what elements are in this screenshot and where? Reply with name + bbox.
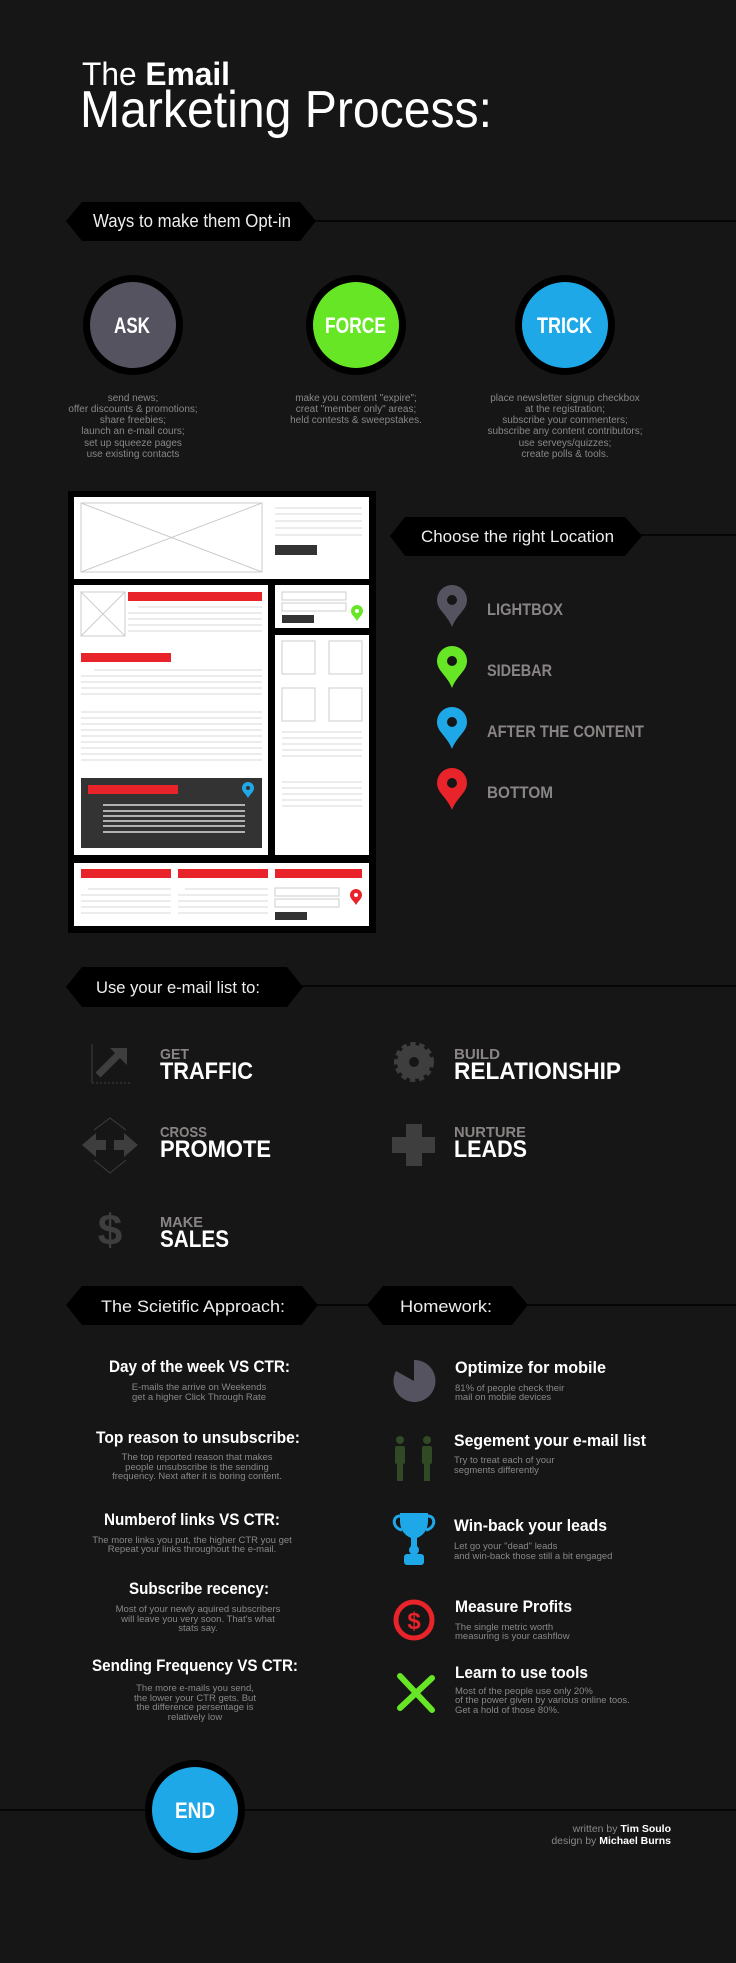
homework: profits: The single metric worth (455, 1622, 553, 1633)
location list: AFTER THE CONTENT (487, 722, 645, 741)
text: cross promote: PROMOTE (160, 1136, 271, 1163)
text: make sales: SALES (160, 1226, 229, 1253)
scientific items: get a higher Click Through Rate (132, 1392, 266, 1403)
credits: design by Michael Burns (551, 1835, 671, 1847)
homework: mobile (455, 1358, 606, 1403)
text: ask list: send news; (108, 393, 158, 404)
homework: segment: segments differently (454, 1465, 539, 1476)
text: trick list: place newsletter signup checkbox (490, 393, 640, 404)
text: nurture leads (454, 1124, 527, 1163)
circle: ASK (83, 275, 183, 375)
icon: gear (397, 1045, 431, 1079)
scientific items: Sending Frequency VS CTR: (92, 1656, 298, 1675)
location list: LIGHTBOX (487, 600, 564, 619)
banner: opt-in (66, 202, 736, 241)
icon: pie (393, 1360, 435, 1402)
banner: opt-in: Ways to make them Opt-in (93, 211, 291, 231)
homework: win-back: Win-back your leads (454, 1516, 607, 1535)
scientific items: frequency. Next after it is boring content. (112, 1471, 282, 1482)
banner: homework (367, 1286, 528, 1325)
homework: win-back: and win-back those still a bit engaged (454, 1551, 612, 1562)
circle: FORCE: FORCE (325, 313, 386, 338)
homework: tools (455, 1663, 630, 1716)
icon: tools (400, 1676, 432, 1710)
text: ask list: set up squeeze pages (84, 438, 182, 449)
scientific items: The more links you put, the higher CTR you get (92, 1535, 292, 1546)
text: ask list: use existing contacts (87, 449, 179, 460)
title (80, 56, 492, 139)
banner: use list (66, 967, 736, 1007)
banner: homework: Homework: (400, 1297, 492, 1316)
homework: tools: Learn to use tools (455, 1663, 588, 1682)
banner: scientific (66, 1286, 736, 1325)
text: force list: held contests & sweepstakes. (290, 415, 422, 426)
homework: mobile: mail on mobile devices (455, 1392, 551, 1403)
homework: tools: Get a hold of those 80%. (455, 1705, 560, 1716)
scientific items: the lower your CTR gets. But (134, 1693, 256, 1704)
scientific items: relatively low (168, 1712, 222, 1723)
circle: TRICK: TRICK (537, 313, 592, 338)
text: ask list: launch an e-mail cours; (81, 426, 185, 437)
text: get traffic (160, 1046, 253, 1085)
icon: dollar: $ (98, 1206, 122, 1255)
scientific items: Numberof links VS CTR: (104, 1510, 280, 1529)
homework: segment: Segement your e-mail list (454, 1431, 646, 1450)
scientific items (92, 1357, 300, 1723)
icon: dollar circle: $ (407, 1608, 421, 1635)
title: Marketing Process: (80, 81, 492, 139)
text: cross promote: CROSS (160, 1124, 207, 1141)
homework: mobile: 81% of people check their (455, 1383, 564, 1394)
scientific items: Top reason to unsubscribe: (96, 1428, 300, 1447)
homework: segment (454, 1431, 646, 1476)
credits (551, 1823, 671, 1847)
text: trick list (487, 393, 643, 460)
circle: FORCE (306, 275, 406, 375)
text: nurture leads: NURTURE (454, 1124, 526, 1141)
homework: profits (455, 1597, 572, 1642)
banner: location (390, 517, 736, 556)
scientific items: stats say. (178, 1623, 218, 1634)
circle: TRICK (515, 275, 615, 375)
circle: ASK: ASK (114, 313, 150, 338)
end line and circle (0, 1760, 736, 1860)
text: trick list: subscribe your commenters; (502, 415, 628, 426)
text: ask list (68, 393, 198, 460)
icon: traffic (92, 1044, 131, 1083)
homework: profits: measuring is your cashflow (455, 1631, 570, 1642)
title: The Email (82, 56, 230, 92)
text: force list: make you comtent "expire"; (295, 393, 417, 404)
scientific items: Subscribe recency: (129, 1579, 269, 1598)
scientific items: Repeat your links throughout the e-mail. (108, 1544, 276, 1555)
text: make sales: MAKE (160, 1214, 203, 1231)
scientific items: E-mails the arrive on Weekends (132, 1382, 266, 1393)
location list: BOTTOM (487, 783, 553, 802)
location list: SIDEBAR (487, 661, 552, 680)
text: force list (290, 393, 422, 426)
text: trick list: at the registration; (525, 404, 605, 415)
homework: tools: Most of the people use only 20% (455, 1686, 593, 1697)
homework: profits: Measure Profits (455, 1597, 572, 1616)
text: build relationship: RELATIONSHIP (454, 1058, 621, 1085)
text: trick list: subscribe any content contributors; (487, 426, 643, 437)
text: build relationship: BUILD (454, 1046, 500, 1063)
banner: scientific: The Scietific Approach: (101, 1297, 285, 1316)
scientific items: Day of the week VS CTR: (109, 1357, 290, 1376)
text: trick list: use serveys/quizzes; (519, 438, 611, 449)
icon: dollar circle (396, 1602, 432, 1638)
banner: location: Choose the right Location (421, 527, 614, 546)
credits: written by Tim Soulo (572, 1823, 671, 1835)
scientific items: The more e-mails you send, (136, 1683, 254, 1694)
scientific items: the difference persentage is (136, 1702, 254, 1713)
icon: people (395, 1436, 432, 1481)
scientific items: people unsubscribe is the sending (125, 1462, 269, 1473)
text: nurture leads: LEADS (454, 1136, 527, 1163)
homework: win-back: Let go your "dead" leads (454, 1541, 558, 1552)
text: force list: creat "member only" areas; (296, 404, 416, 415)
homework: tools: of the power given by various online toos. (455, 1695, 630, 1706)
location list (437, 585, 645, 810)
pin: after content (437, 707, 467, 749)
text: ask list: share freebies; (100, 415, 166, 426)
pin: bottom (437, 768, 467, 810)
text: get traffic: GET (160, 1046, 189, 1063)
text: ask list: offer discounts & promotions; (68, 404, 198, 415)
text: make sales (160, 1214, 229, 1253)
pin: sidebar (437, 646, 467, 688)
scientific items: Most of your newly aquired subscribers (116, 1604, 281, 1615)
homework: segment: Try to treat each of your (454, 1455, 554, 1466)
scientific items: will leave you very soon. That's what (120, 1614, 275, 1625)
homework: mobile: Optimize for mobile (455, 1358, 606, 1377)
pin: lightbox (437, 585, 467, 627)
icon: plus (392, 1124, 435, 1166)
text: build relationship (454, 1046, 621, 1085)
icon: trophy (394, 1513, 434, 1565)
homework: win-back (454, 1516, 612, 1562)
scientific items: The top reported reason that makes (121, 1452, 273, 1463)
text: cross promote (160, 1124, 271, 1163)
icon: cross arrows (82, 1118, 138, 1173)
text: get traffic: TRAFFIC (160, 1058, 253, 1085)
end line and circle: END (175, 1798, 215, 1823)
banner: use list: Use your e-mail list to: (96, 978, 260, 997)
text: trick list: create polls & tools. (521, 449, 609, 460)
wireframe: page layout (68, 491, 376, 933)
